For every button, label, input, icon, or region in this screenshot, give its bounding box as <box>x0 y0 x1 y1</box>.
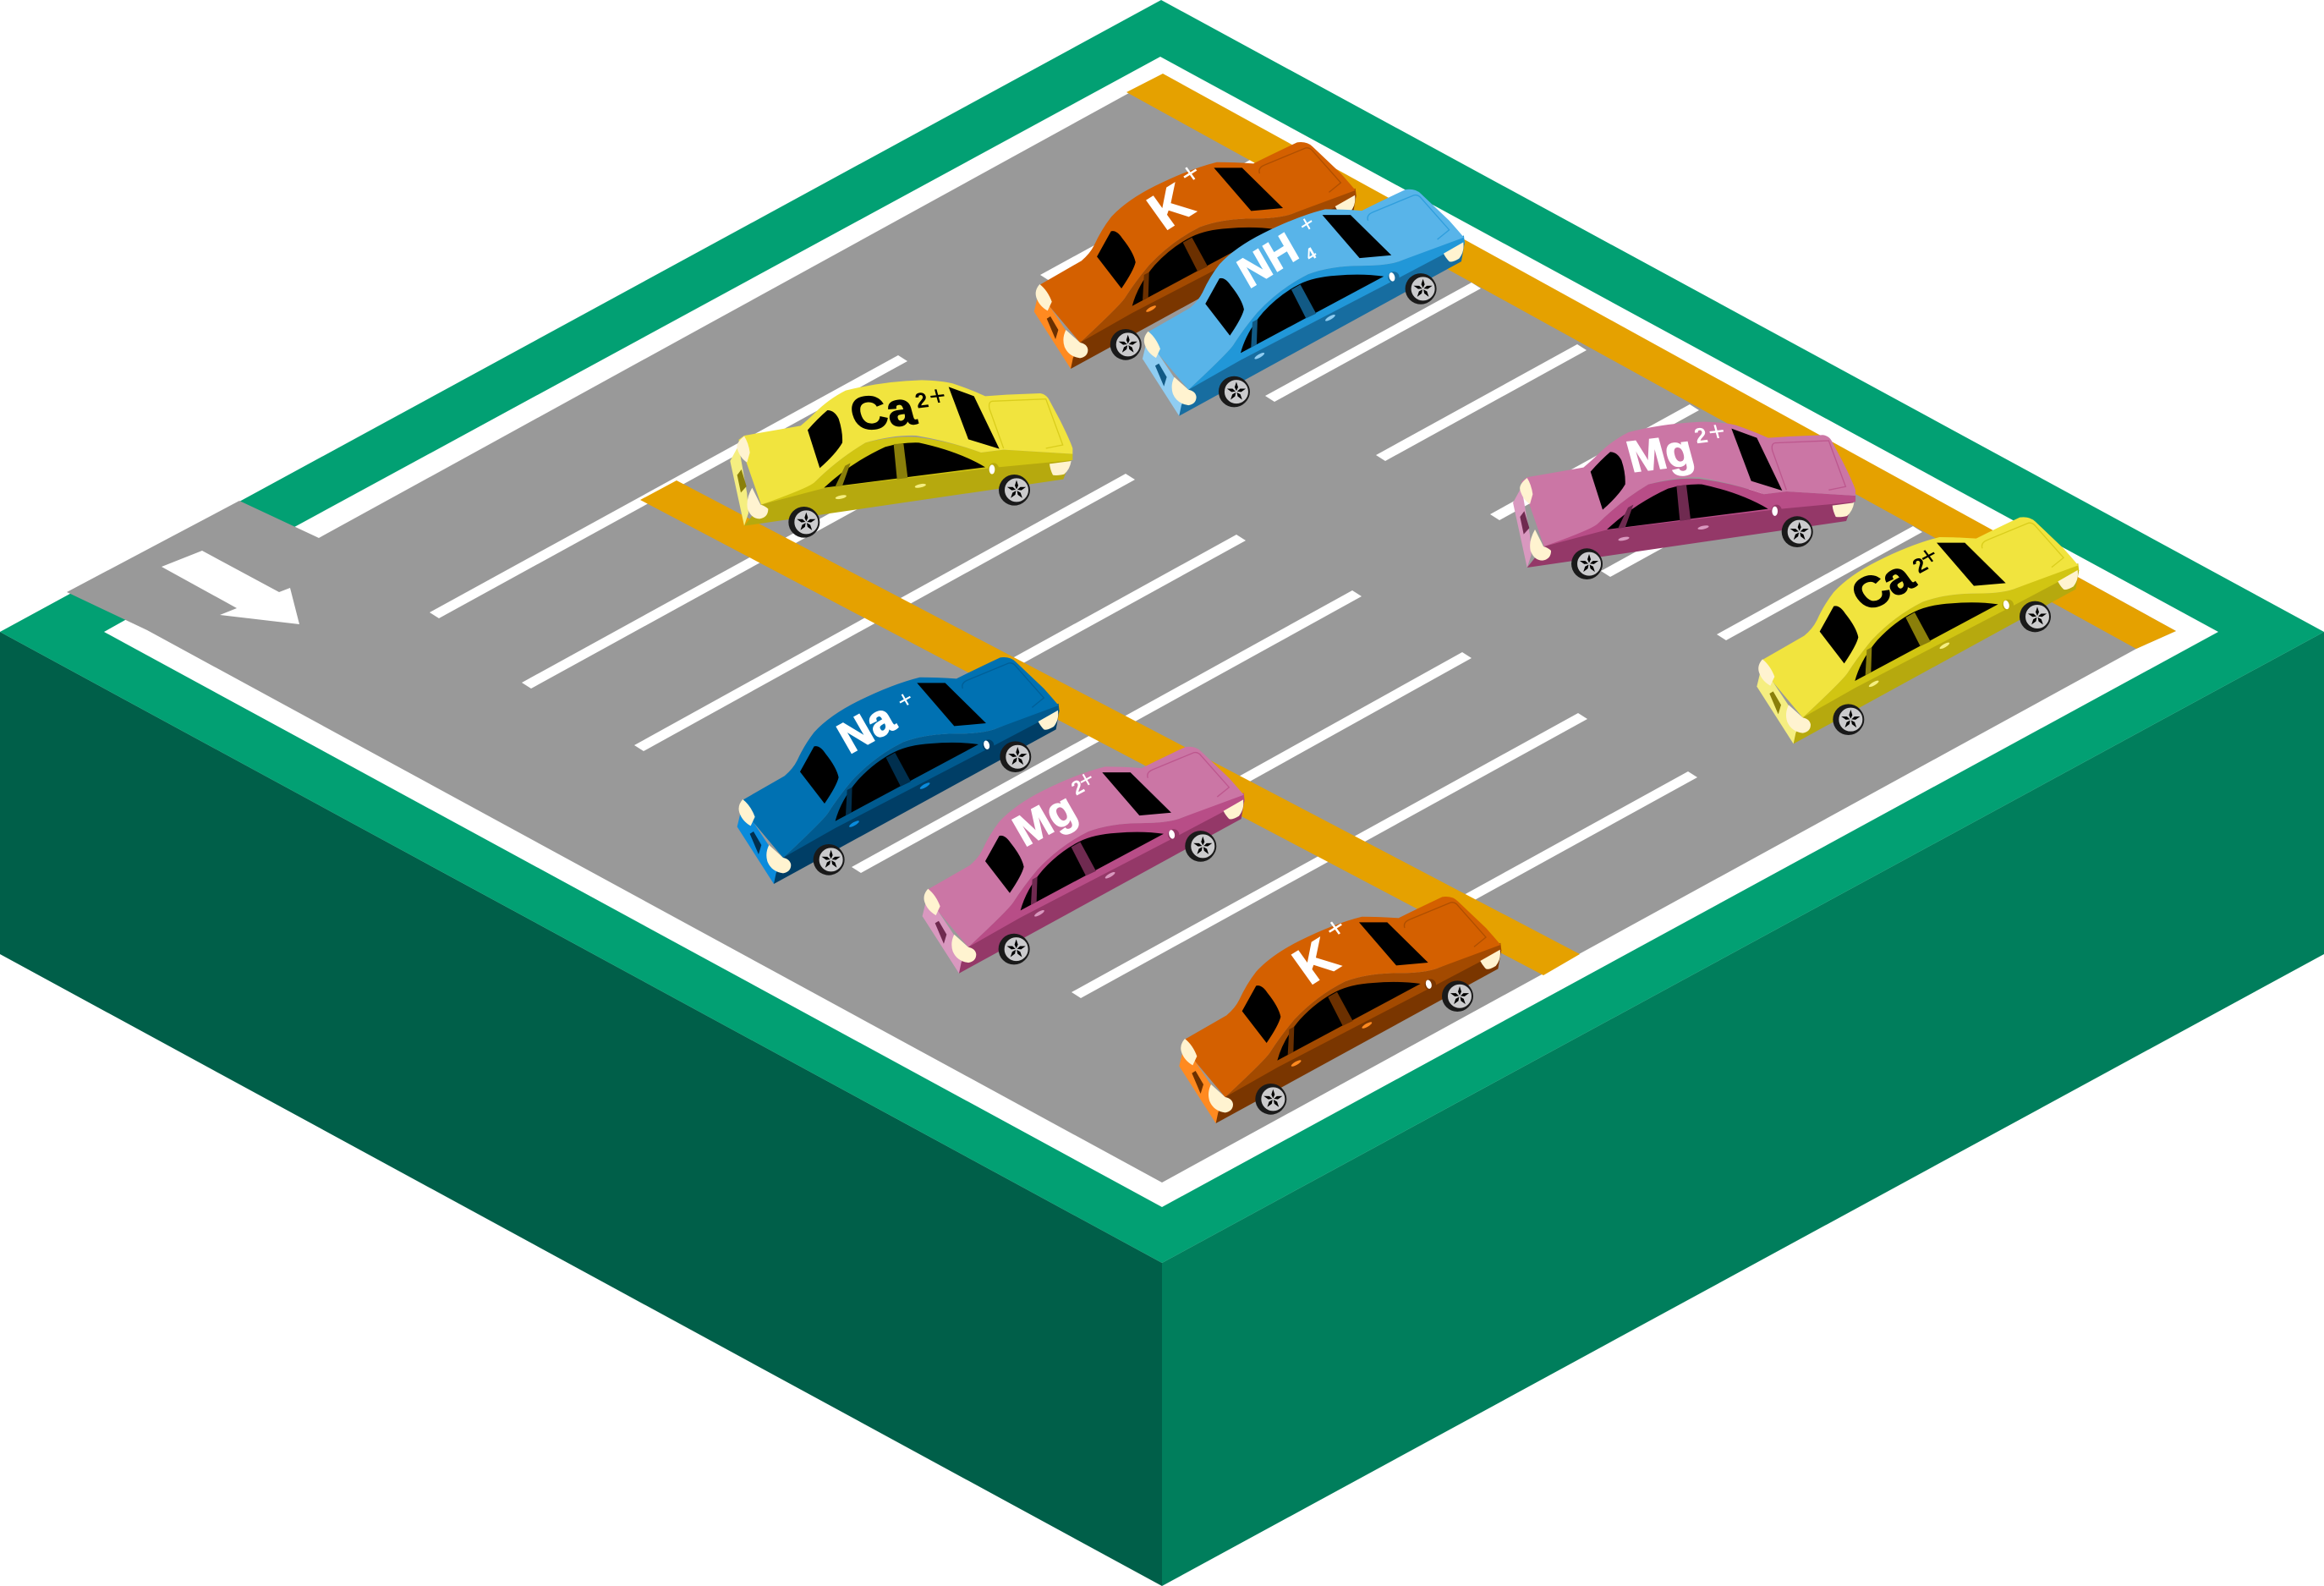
car: K+ orange, front row: + <box>1318 910 1352 947</box>
car: Ca2+ yellow, right <box>1757 517 2079 744</box>
car: Na+ dark blue: Na <box>830 692 903 762</box>
car: Ca2+ yellow, right: Ca <box>1842 552 1924 621</box>
car: Mg2+ pink, front row: + <box>1073 765 1099 795</box>
green top border <box>0 0 2324 1263</box>
car: NH4+ light blue: 4 <box>1302 244 1320 265</box>
entrance arrow <box>162 551 299 624</box>
car: K+ orange, front row: K <box>1283 928 1349 996</box>
planter left side face <box>0 632 1162 1586</box>
car: NH4+ light blue: + <box>1294 209 1319 239</box>
asphalt parking surface with entrance <box>67 74 2176 1183</box>
car: Ca2+ yellow, left: + <box>925 381 950 413</box>
car: Mg2+ pink, front row: 2 <box>1067 775 1088 799</box>
car: K+ orange, back row <box>1034 142 1357 369</box>
car: Na+ dark blue <box>737 657 1060 884</box>
car: Ca2+ yellow, left <box>730 380 1072 538</box>
planter right side face <box>1162 632 2324 1586</box>
car: NH4+ light blue: NH <box>1230 223 1306 297</box>
car: Ca2+ yellow, left: 2 <box>913 389 931 413</box>
car: Mg2+ pink, right <box>1513 416 1855 579</box>
orange divider, middle row <box>640 480 1580 975</box>
car: Mg2+ pink, front row <box>923 747 1245 974</box>
orange divider, back row <box>1126 74 2176 649</box>
car: K+ orange, back row: + <box>1173 156 1207 192</box>
car: Na+ dark blue: + <box>892 684 918 716</box>
car: Mg2+ pink, front row: Mg <box>1005 783 1084 855</box>
car: Mg2+ pink, right: Mg <box>1621 426 1699 482</box>
car: Mg2+ pink, right: + <box>1704 416 1729 448</box>
car: Ca2+ yellow, right: 2 <box>1908 553 1932 578</box>
car: NH4+ light blue <box>1143 189 1465 416</box>
car: Ca2+ yellow, right: + <box>1911 539 1944 572</box>
car: K+ orange, back row: K <box>1137 173 1203 241</box>
car: Ca2+ yellow, left: Ca <box>845 382 922 442</box>
car: K+ orange, front row <box>1179 897 1501 1123</box>
white lot outline <box>104 57 2218 1207</box>
parking space lines <box>430 159 1922 998</box>
car: Mg2+ pink, right: 2 <box>1692 424 1710 448</box>
